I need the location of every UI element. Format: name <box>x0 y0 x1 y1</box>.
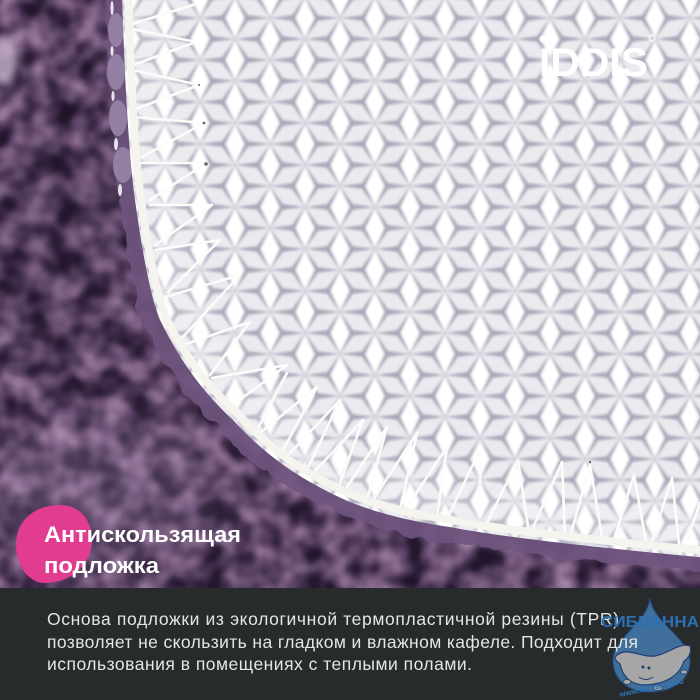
white rubber backing with star texture <box>100 0 700 565</box>
brand logo: IDDIS: IDDIS <box>539 41 648 85</box>
watermark brand name: СИБВАННА <box>601 614 699 631</box>
heading <box>44 522 241 578</box>
heading: подложка <box>44 553 160 578</box>
watermark: Sibvanna drop with bathtub <box>613 598 691 699</box>
description text: позволяет не скользить на гладком и влажном кафеле. Подходит для <box>47 632 638 652</box>
bottom dark panel <box>0 588 700 700</box>
heading: Антискользящая <box>44 522 241 547</box>
bathtub feet <box>623 670 688 690</box>
water drop <box>613 598 690 692</box>
pink blob badge <box>16 505 92 583</box>
bathtub <box>615 645 691 685</box>
bathtub face <box>639 666 653 680</box>
stitch end marks <box>198 84 591 463</box>
description text: Основа подложки из экологичной термопластичной резины (TPR) <box>47 609 619 629</box>
description text <box>47 609 638 674</box>
mat edge: purple overlock rim <box>107 0 700 560</box>
white zigzag stitching <box>127 0 700 553</box>
website: www.sibvanna.ru <box>618 677 685 699</box>
description text: использования в помещениях с теплыми полами. <box>47 654 472 674</box>
